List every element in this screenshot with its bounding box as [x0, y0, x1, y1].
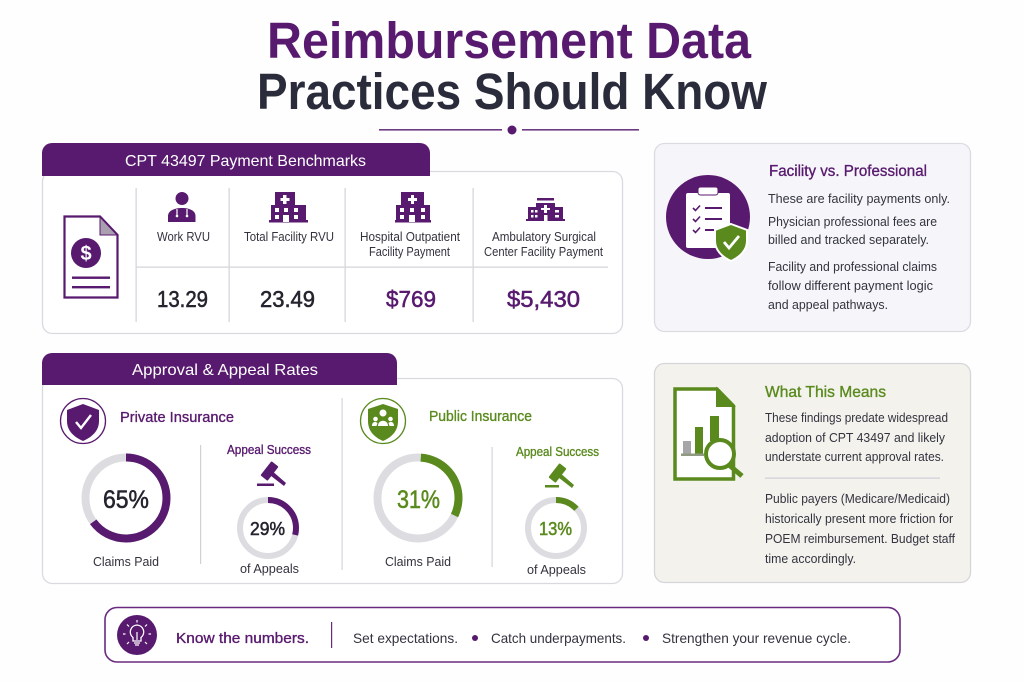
donut: 13% of appeals: of Appeals	[527, 562, 586, 577]
text block: findings: These findings predate widespread	[765, 410, 948, 425]
column: ambulatory surgical center facility payment: Center Facility Payment	[484, 245, 603, 259]
donut: 65% claims paid	[86, 458, 166, 569]
column: hospital outpatient facility payment: Facility Payment	[369, 245, 450, 259]
column: hospital outpatient facility payment	[360, 230, 460, 312]
panel header	[42, 143, 430, 176]
donut: 29% of appeals: 29%	[250, 519, 285, 539]
text block: facility payments: These are facility payments only.	[768, 191, 950, 206]
title	[257, 12, 767, 120]
panel header: CPT 43497 Payment Benchmarks	[125, 153, 366, 170]
donut: 13% of appeals: 13%	[539, 519, 572, 539]
heading: appeal success public: Appeal Success	[516, 444, 599, 459]
heading: what this means: What This Means	[765, 384, 886, 401]
icon: doctor	[168, 192, 196, 222]
title divider	[379, 126, 639, 134]
icon: invoice document: $	[80, 243, 92, 265]
donut: 65% claims paid: Claims Paid	[93, 554, 159, 569]
panel: CPT 43497 payment benchmarks	[42, 143, 622, 334]
text block: facility payments	[768, 191, 950, 312]
heading: facility vs professional: Facility vs. Professional	[769, 163, 927, 180]
column: hospital outpatient facility payment: Hospital Outpatient	[360, 230, 460, 244]
text: takeaways: Catch underpayments.	[491, 630, 626, 646]
heading: public insurance: Public Insurance	[429, 408, 532, 425]
panel header	[42, 353, 397, 385]
icon: hospital	[269, 192, 308, 222]
heading: private insurance: Private Insurance	[120, 409, 234, 426]
text: takeaways	[353, 630, 851, 646]
icon: gavel public	[545, 463, 574, 488]
icon: report with magnifier	[675, 389, 742, 479]
icon: light bulb	[117, 615, 157, 655]
text block: public payers: POEM reimbursement. Budget staff	[765, 531, 955, 546]
column: work RVU	[157, 230, 210, 312]
text block: findings: adoption of CPT 43497 and likely	[765, 430, 945, 445]
donut: 29% of appeals	[240, 500, 299, 576]
column: total facility RVU	[244, 230, 334, 312]
text block: facility payments: Facility and professional claims	[768, 259, 937, 274]
donut: 29% of appeals: of Appeals	[240, 561, 299, 576]
text block: facility payments: and appeal pathways.	[768, 297, 888, 312]
icon: hospital outpatient	[395, 192, 431, 222]
panel: facility vs professional	[654, 144, 970, 332]
title: Practices Should Know	[257, 63, 767, 120]
column: ambulatory surgical center facility payment: Ambulatory Surgical	[492, 230, 596, 244]
donut: 65% claims paid: 65%	[103, 486, 149, 514]
column: ambulatory surgical center facility payment: $5,430	[507, 286, 580, 312]
icon: ambulatory surgical center	[526, 198, 565, 221]
panel header: Approval & Appeal Rates	[132, 362, 318, 379]
column: work RVU: Work RVU	[157, 230, 210, 244]
table grid	[136, 188, 608, 322]
column: work RVU: 13.29	[157, 286, 208, 312]
column: hospital outpatient facility payment: $769	[386, 286, 436, 312]
text block: public payers: time accordingly.	[765, 551, 856, 566]
column: total facility RVU: Total Facility RVU	[244, 230, 334, 244]
icon: clipboard with shield	[666, 175, 750, 261]
text: know the numbers: Know the numbers.	[176, 631, 309, 647]
title: Reimbursement Data	[267, 12, 752, 69]
column: total facility RVU: 23.49	[260, 286, 315, 312]
callout: bottom takeaway bar	[105, 608, 900, 662]
text block: facility payments: billed and tracked separately.	[768, 232, 929, 247]
text: takeaways: Set expectations.	[353, 630, 458, 646]
icon: public insurance shield	[360, 398, 406, 444]
heading: appeal success private: Appeal Success	[227, 442, 311, 457]
text block: public payers: Public payers (Medicare/Medicaid)	[765, 491, 950, 506]
text block: facility payments: Physician professional fees are	[768, 214, 937, 229]
donut: 31% claims paid: Claims Paid	[385, 554, 451, 569]
donut: 31% claims paid: 31%	[397, 486, 440, 514]
icon: private insurance shield	[60, 398, 106, 444]
donut: 13% of appeals	[527, 500, 586, 577]
column: ambulatory surgical center facility payment	[484, 230, 603, 312]
text block: findings	[765, 410, 948, 464]
panel: what this means	[654, 364, 970, 582]
text block: facility payments: follow different payment logic	[768, 278, 933, 293]
icon: gavel private	[257, 461, 286, 486]
panel: approval and appeal rates	[42, 353, 622, 584]
text block: findings: understate current approval rates.	[765, 449, 944, 464]
text block: public payers	[765, 491, 955, 566]
donut: 31% claims paid	[375, 455, 461, 569]
text block: public payers: historically present more friction for	[765, 511, 954, 526]
icon: invoice document	[64, 216, 118, 298]
text: takeaways: Strengthen your revenue cycle.	[662, 630, 851, 646]
